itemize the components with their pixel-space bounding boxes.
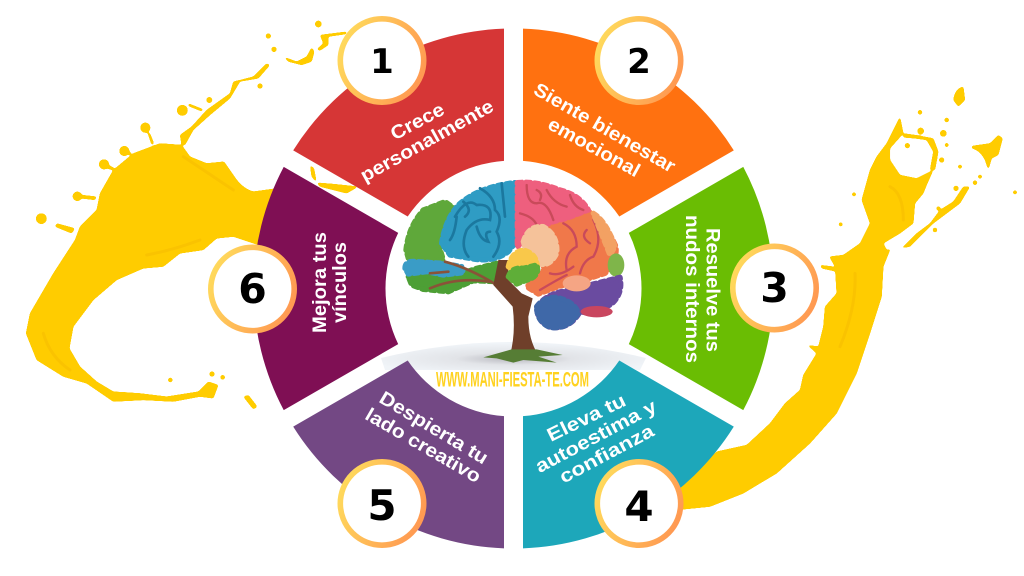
number badge 5 [340,462,424,545]
number badge 1: 1 [370,42,394,82]
brain: orange patch right [593,213,615,255]
tree trunk [493,260,538,355]
text: Siente bienestar emocional: Siente bienestar [530,79,679,178]
ground shadow behind wheel [381,342,646,370]
tree branches [430,262,497,288]
text: Eleva tu autoestima y confianza: autoestima y [532,396,661,478]
text: Mejora tus vinculos [310,232,351,333]
text: Despierta tu lado creativo: lado creativo [361,405,484,488]
number badge 6 [211,247,294,331]
panel: segment 4 teal [523,361,734,548]
number badge 6: 6 [238,265,267,313]
text: Eleva tu autoestima y confianza: Eleva tu [544,390,630,447]
number badge 3 [733,246,816,330]
yellow paint splash right [677,87,1017,510]
website url: WWW.MANI-FIESTA-TE.COM [436,368,589,392]
brain: green lower lobe [408,263,497,292]
brain folds: pink and orange [520,185,613,290]
brain: green small lobe [508,265,538,284]
brain: green left lobe [406,202,457,262]
text: Mejora tus vinculos: vínculos [330,242,351,323]
text: Resuelve tus nudos internos: nudos internos [681,215,702,363]
text: Despierta tu lado creativo: Despierta tu [375,388,492,469]
text: Mejora tus vinculos: Mejora tus [310,232,331,333]
brain: purple lower lobe [537,277,621,328]
panel: segment 3 green [629,167,773,410]
brain: green right lobe [608,253,624,277]
text: Crece personalmente: personalmente [357,96,497,187]
brain: pink top lobe [517,182,588,247]
brain: orange main lobe [527,212,616,294]
yellow paint splash left [26,21,358,409]
text: Crece personalmente: Crece [387,99,448,145]
number badge 4 [597,462,681,545]
text: Despierta tu lado creativo [361,388,492,488]
grass [483,349,563,363]
number badge 2: 2 [627,42,651,82]
text: Siente bienestar emocional: emocional [544,114,643,182]
number badge 4: 4 [624,482,654,531]
number badge 5: 5 [367,481,397,530]
panel: segment 2 orange [523,29,734,216]
text: Resuelve tus nudos internos: Resuelve tus [702,228,723,352]
panel: segment 1 red [293,29,504,216]
panel: segment 5 purple [293,361,504,548]
brain: blue lower lobe [405,261,463,275]
central illustration: brain tree [405,182,624,363]
brain: peach small lobe [563,275,591,291]
text: Resuelve tus nudos internos [681,215,723,363]
brain: pink under lobe [581,306,613,317]
number badge 3: 3 [760,264,789,312]
panel: segment 6 maroon [254,167,398,410]
text: Eleva tu autoestima y confianza [532,390,661,488]
number badge 2 [597,19,681,102]
brain folds: blue [450,183,505,257]
brain: blue purple lobe [537,297,578,328]
number badge 1 [340,19,424,102]
brain: peach lobe [523,227,557,264]
brain: blue main lobe [442,183,515,260]
brain: yellow small lobe [508,250,537,275]
text: Eleva tu autoestima y confianza: confianza [556,421,658,488]
